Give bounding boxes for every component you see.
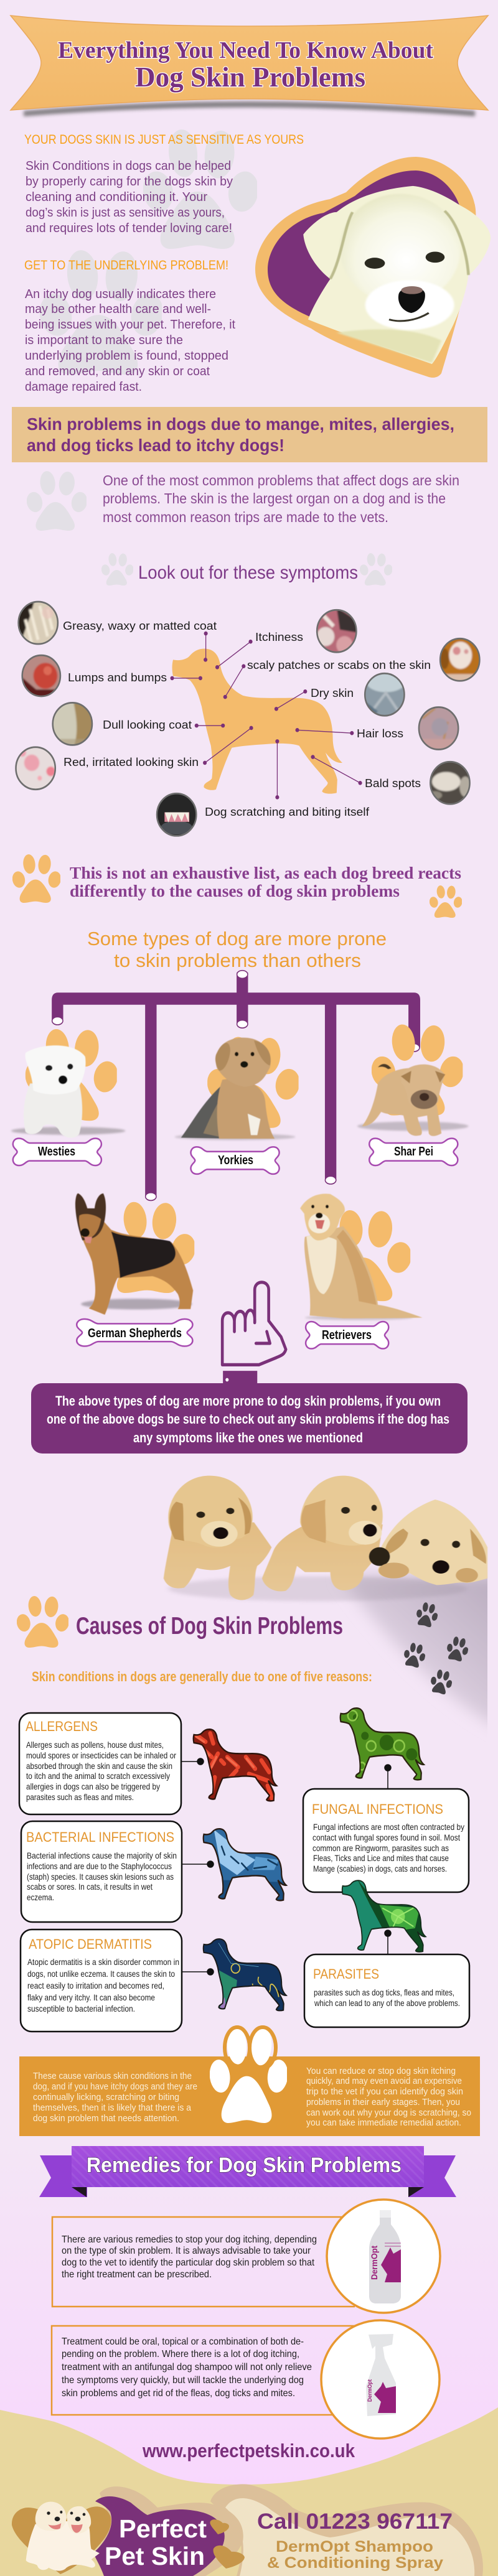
small gold hearts: [210, 2519, 229, 2534]
photo: greasy coat: [19, 602, 57, 643]
gold heart: [12, 2506, 111, 2574]
callout: prone breeds: [31, 1383, 467, 1454]
card: bacterial infections: infections and are due to the Staphylococcus: [27, 1861, 172, 1871]
right summary: quickly, and may even avoid an expensive: [306, 2076, 462, 2086]
heart with puppy: [255, 157, 491, 378]
intro paragraph: [103, 472, 459, 525]
headline band: Skin problems in dogs due to mange, mites, allergies,: [27, 414, 454, 434]
intro text: underlying problem: and removed, and any skin or coat: [25, 365, 210, 378]
card: allergens: [19, 1713, 181, 1814]
connector lines: [181, 1758, 391, 1975]
remedy 2: treatment with an antifungal dog shampoo will not only relieve: [62, 2362, 312, 2373]
causes heading: Skin conditions in dogs are generally due to one of five reasons:: [32, 1669, 372, 1684]
teal dog: parasites: [342, 1880, 426, 1953]
phone number: Call 01223 967117: [257, 2509, 453, 2534]
remedy 1: the right treatment can be prescribed.: [62, 2269, 212, 2280]
footer sand wave: [0, 2407, 498, 2576]
symptom labels: Itchiness: [255, 630, 303, 643]
photo: dry skin: [366, 674, 403, 715]
product names: [267, 2538, 443, 2572]
intro paragraph: One of the most common problems that affect dogs are skin: [103, 472, 459, 488]
spray bottle: DermOpt: [367, 2379, 374, 2402]
logo wordmark: Pet Skin: [105, 2542, 205, 2570]
remedies ribbon: Remedies for Dog Skin Problems: [87, 2154, 402, 2177]
card: fungal infections: Mange (scabies) in dogs, cats and horses.: [313, 1864, 447, 1874]
symptom labels: scaly patches or scabs on the skin: [247, 658, 431, 671]
remedy 1: [52, 2200, 440, 2313]
intro text: sensitive skin: Skin Conditions in dogs can be helped: [26, 159, 231, 173]
dog: shar pei: [357, 1064, 469, 1136]
shampoo bottle: [327, 2200, 440, 2313]
photo: itchiness: [317, 611, 356, 651]
card: fungal infections: contact with fungal spores found in soil. Most: [312, 1832, 460, 1842]
intro text: sensitive skin: cleaning and conditioning it. Your: [26, 190, 207, 204]
card: atopic dermatitis: [21, 1930, 182, 2032]
breed names: Westies: [38, 1145, 75, 1159]
card: atopic dermatitis: Atopic dermatitis is a skin disorder common in: [27, 1957, 179, 1967]
symptom leader lines: [172, 633, 360, 797]
intro text: underlying problem: GET TO THE UNDERLYING PROBLEM!: [24, 258, 228, 273]
card: allergens: to itch and the animal to scratch excessively: [26, 1771, 170, 1781]
note: not exhaustive: [11, 854, 463, 918]
remedy 1: dog to the vet to identify the particular dog skin problem so that: [62, 2257, 315, 2268]
photo: scaly patches: [441, 640, 479, 680]
card: fungal infections: FUNGAL INFECTIONS: [312, 1801, 443, 1817]
intro text: sensitive skin: and requires lots of tender loving care!: [26, 222, 232, 235]
photo rings: [16, 602, 479, 836]
intro text: underlying problem: is important to make sure the: [25, 334, 183, 347]
three puppies: [164, 1476, 487, 1601]
intro text: underlying problem: may be other health care and well-: [25, 302, 211, 316]
photo: bald spots: [431, 763, 469, 803]
product names: & Conditioning Spray: [267, 2554, 443, 2572]
paw prints: [401, 1600, 471, 1696]
remedy 1: There are various remedies to stop your dog itching, depending: [62, 2234, 317, 2245]
callout: prone breeds: any symptoms like the ones we mentioned: [133, 1430, 363, 1445]
card: allergens: absorbed through the skin and cause the skin: [26, 1761, 172, 1771]
card: atopic dermatitis: react easily to irritation and becomes red,: [27, 1981, 164, 1990]
card: bacterial infections: Bacterial infections cause the majority of skin: [27, 1850, 177, 1860]
breeds tree: [11, 971, 469, 1385]
title text: [58, 37, 433, 93]
tree connector: [52, 971, 420, 1200]
note: not exhaustive: This is not an exhaustive list, as each dog breed reacts: [70, 864, 461, 882]
right summary: you can take immediate remedial action.: [306, 2117, 461, 2128]
breed names: Yorkies: [218, 1154, 253, 1167]
green dog: fungal: [340, 1707, 424, 1781]
card: atopic dermatitis: dogs, not unlike eczema. It causes the skin to: [27, 1969, 175, 1979]
card: bacterial infections: scabs or sores. In cats, it results in wet: [27, 1882, 153, 1892]
dog silhouette: [172, 649, 342, 794]
red dog: allergens: [193, 1729, 277, 1802]
card: fungal infections: Fleas, Ticks and Lice and mites that cause: [313, 1853, 449, 1863]
card: bacterial infections: (staph) species. It causes skin lesions such as: [27, 1872, 174, 1882]
intro text: sensitive skin: [24, 133, 304, 235]
intro text: underlying problem: damage repaired fast.: [25, 380, 142, 394]
left summary: themselves, then it is likely that there is a: [33, 2102, 192, 2113]
causes heading: Causes of Dog Skin Problems: [76, 1613, 343, 1640]
card: parasites: parasites such as dog ticks, fleas and mites,: [314, 1987, 454, 1997]
card: bacterial infections: BACTERIAL INFECTIONS: [26, 1829, 174, 1845]
card: bacterial infections: eczema.: [27, 1892, 54, 1902]
remedies ribbon: [39, 2146, 456, 2197]
right summary: You can reduce or stop dog skin itching: [306, 2066, 456, 2076]
breed names: Retrievers: [322, 1328, 372, 1342]
card: atopic dermatitis: flaky and very itchy. It can also become: [27, 1992, 155, 2002]
photo: biting: [157, 794, 195, 835]
puppy 3: [369, 1500, 487, 1585]
intro text: sensitive skin: dog’s skin is just as sensitive as yours,: [26, 206, 225, 220]
remedy 2: the symptoms very quickly, but will tackle the underlying dog: [62, 2375, 304, 2386]
card: fungal infections: Fungal infections are most often contracted by: [313, 1822, 464, 1832]
left summary: dog, and if you have itchy dogs and they are: [33, 2081, 197, 2092]
card: parasites: which can lead to any of the above problems.: [314, 1998, 460, 2008]
card: atopic dermatitis: susceptible to bacterial infection.: [27, 2004, 135, 2014]
orange summary band: [19, 2024, 480, 2136]
card: fungal infections: [303, 1789, 469, 1892]
breed names: [38, 1145, 433, 1342]
symptom labels: Lumps and bumps: [68, 671, 167, 684]
card: atopic dermatitis: ATOPIC DERMATITIS: [29, 1936, 152, 1952]
intro text: underlying problem: underlying problem is found, stopped: [25, 349, 228, 363]
logo puppies: [26, 2502, 100, 2571]
breed names: Shar Pei: [394, 1145, 433, 1159]
puppy: [303, 186, 491, 364]
dark dog: atopic: [203, 1938, 286, 2012]
grey paw icon: [25, 470, 89, 531]
puppy 1: [164, 1476, 271, 1600]
causes heading: [15, 1595, 372, 1684]
icon: pointing hand: [222, 1282, 286, 1385]
dog: yorkie: [175, 1038, 295, 1140]
remedy 2: pending on the problem. Where there is a lot of dog itching,: [62, 2349, 299, 2359]
photo: lumps: [23, 656, 60, 696]
card: allergens: ALLERGENS: [26, 1719, 98, 1734]
intro paragraph: problems. The skin is the largest organ on a dog and is the: [103, 490, 446, 506]
symptoms diagram: [11, 595, 484, 839]
title text: Dog Skin Problems: [135, 61, 365, 93]
spray bottle: [321, 2320, 439, 2438]
symptom labels: Greasy, waxy or matted coat: [63, 619, 217, 632]
footer logo: [12, 2484, 483, 2576]
right summary: trip to the vet if you can identify dog skin: [306, 2086, 463, 2097]
symptom labels: Dull looking coat: [103, 718, 192, 731]
symptom labels: Dog scratching and biting itself: [205, 805, 370, 818]
remedy 2: Treatment could be oral, topical or a combination of both de-: [62, 2336, 304, 2347]
dog: retriever: [300, 1193, 423, 1320]
symptoms heading: Look out for these symptoms: [138, 562, 358, 583]
remedy 2: skin problems and get rid of the fleas, dog ticks and mites.: [62, 2388, 295, 2399]
symptom dots: [170, 632, 362, 800]
background paw watermarks: [36, 128, 262, 375]
dog: westie: [11, 1045, 126, 1138]
left summary: [33, 2071, 197, 2124]
remedy 2: [52, 2320, 439, 2438]
right summary: [306, 2066, 471, 2128]
symptom labels: [63, 619, 431, 818]
intro text: underlying problem: [24, 258, 235, 394]
card: bacterial infections: [21, 1821, 182, 1922]
title text: Everything You Need To Know About: [58, 37, 433, 63]
intro text: underlying problem: An itchy dog usually indicates there: [25, 287, 216, 301]
left summary: continually licking, scratching or biting: [33, 2092, 179, 2102]
photo: red skin: [16, 748, 55, 789]
left summary: dog skin problem that needs attention.: [33, 2113, 179, 2124]
symptom labels: Dry skin: [311, 686, 354, 699]
dog: german shepherd: [75, 1193, 193, 1315]
intro text: underlying problem: being issues with your pet. Therefore, it: [25, 318, 235, 332]
paper fold shadow: [347, 1569, 487, 1726]
intro paragraph: most common reason trips are made to the vets.: [103, 509, 388, 525]
left summary: These cause various skin conditions in the: [33, 2071, 192, 2081]
card: fungal infections: common are Ringworm, parasites such as: [312, 1843, 449, 1853]
card: parasites: [304, 1954, 469, 2027]
logo wordmark: [105, 2514, 207, 2570]
photo: dull coat: [54, 703, 92, 744]
purple heart: [93, 2486, 243, 2576]
remedy 1: on the type of skin problem. It is always advisable to take your: [62, 2246, 311, 2256]
title banner: [11, 16, 488, 116]
right summary: can work out why your dog is scratching, so: [306, 2107, 471, 2118]
breeds heading: Some types of dog are more prone: [87, 928, 387, 950]
symptom labels: Red, irritated looking skin: [63, 755, 199, 768]
note: not exhaustive: differently to the causes of dog skin problems: [70, 882, 400, 900]
blue dog: bacterial: [203, 1828, 286, 1902]
breed names: German Shepherds: [88, 1327, 182, 1340]
shampoo bottle: DermOpt: [369, 2246, 379, 2280]
puppy shadow: [168, 1576, 467, 1601]
logo wordmark: Perfect: [119, 2514, 207, 2543]
tan backing: [210, 2484, 483, 2576]
card: allergens: parasites such as fleas and mites.: [26, 1792, 134, 1802]
breeds heading: [87, 928, 387, 971]
icon: white paw: [207, 2024, 290, 2123]
symptom labels: Hair loss: [357, 727, 403, 740]
card: allergens: Allerges such as pollens, house dust mites,: [26, 1740, 164, 1750]
breeds heading: to skin problems than others: [114, 950, 361, 971]
product names: DermOpt Shampoo: [276, 2538, 433, 2555]
website url: www.perfectpetskin.co.uk: [142, 2440, 355, 2462]
headline band: [12, 407, 487, 462]
photo: hair loss: [420, 708, 458, 749]
card: parasites: PARASITES: [313, 1966, 379, 1982]
symptom labels: Bald spots: [365, 777, 421, 790]
card: allergens: allergies in dogs can also be triggered by: [26, 1781, 160, 1791]
paws behind dogs: [22, 1024, 467, 1301]
right summary: problems in their early stages. Then, you: [306, 2097, 460, 2107]
headline band: and dog ticks lead to itchy dogs!: [27, 436, 284, 455]
bone labels shapes: [13, 1138, 458, 1349]
puppy 2: [262, 1476, 383, 1591]
card: allergens: mould spores or insecticides can be inhaled or: [26, 1750, 176, 1760]
intro text: sensitive skin: YOUR DOGS SKIN IS JUST AS SENSITIVE AS YOURS: [24, 133, 304, 147]
intro text: sensitive skin: by properly caring for the dogs skin by: [26, 175, 233, 189]
symptoms heading: [100, 553, 393, 586]
